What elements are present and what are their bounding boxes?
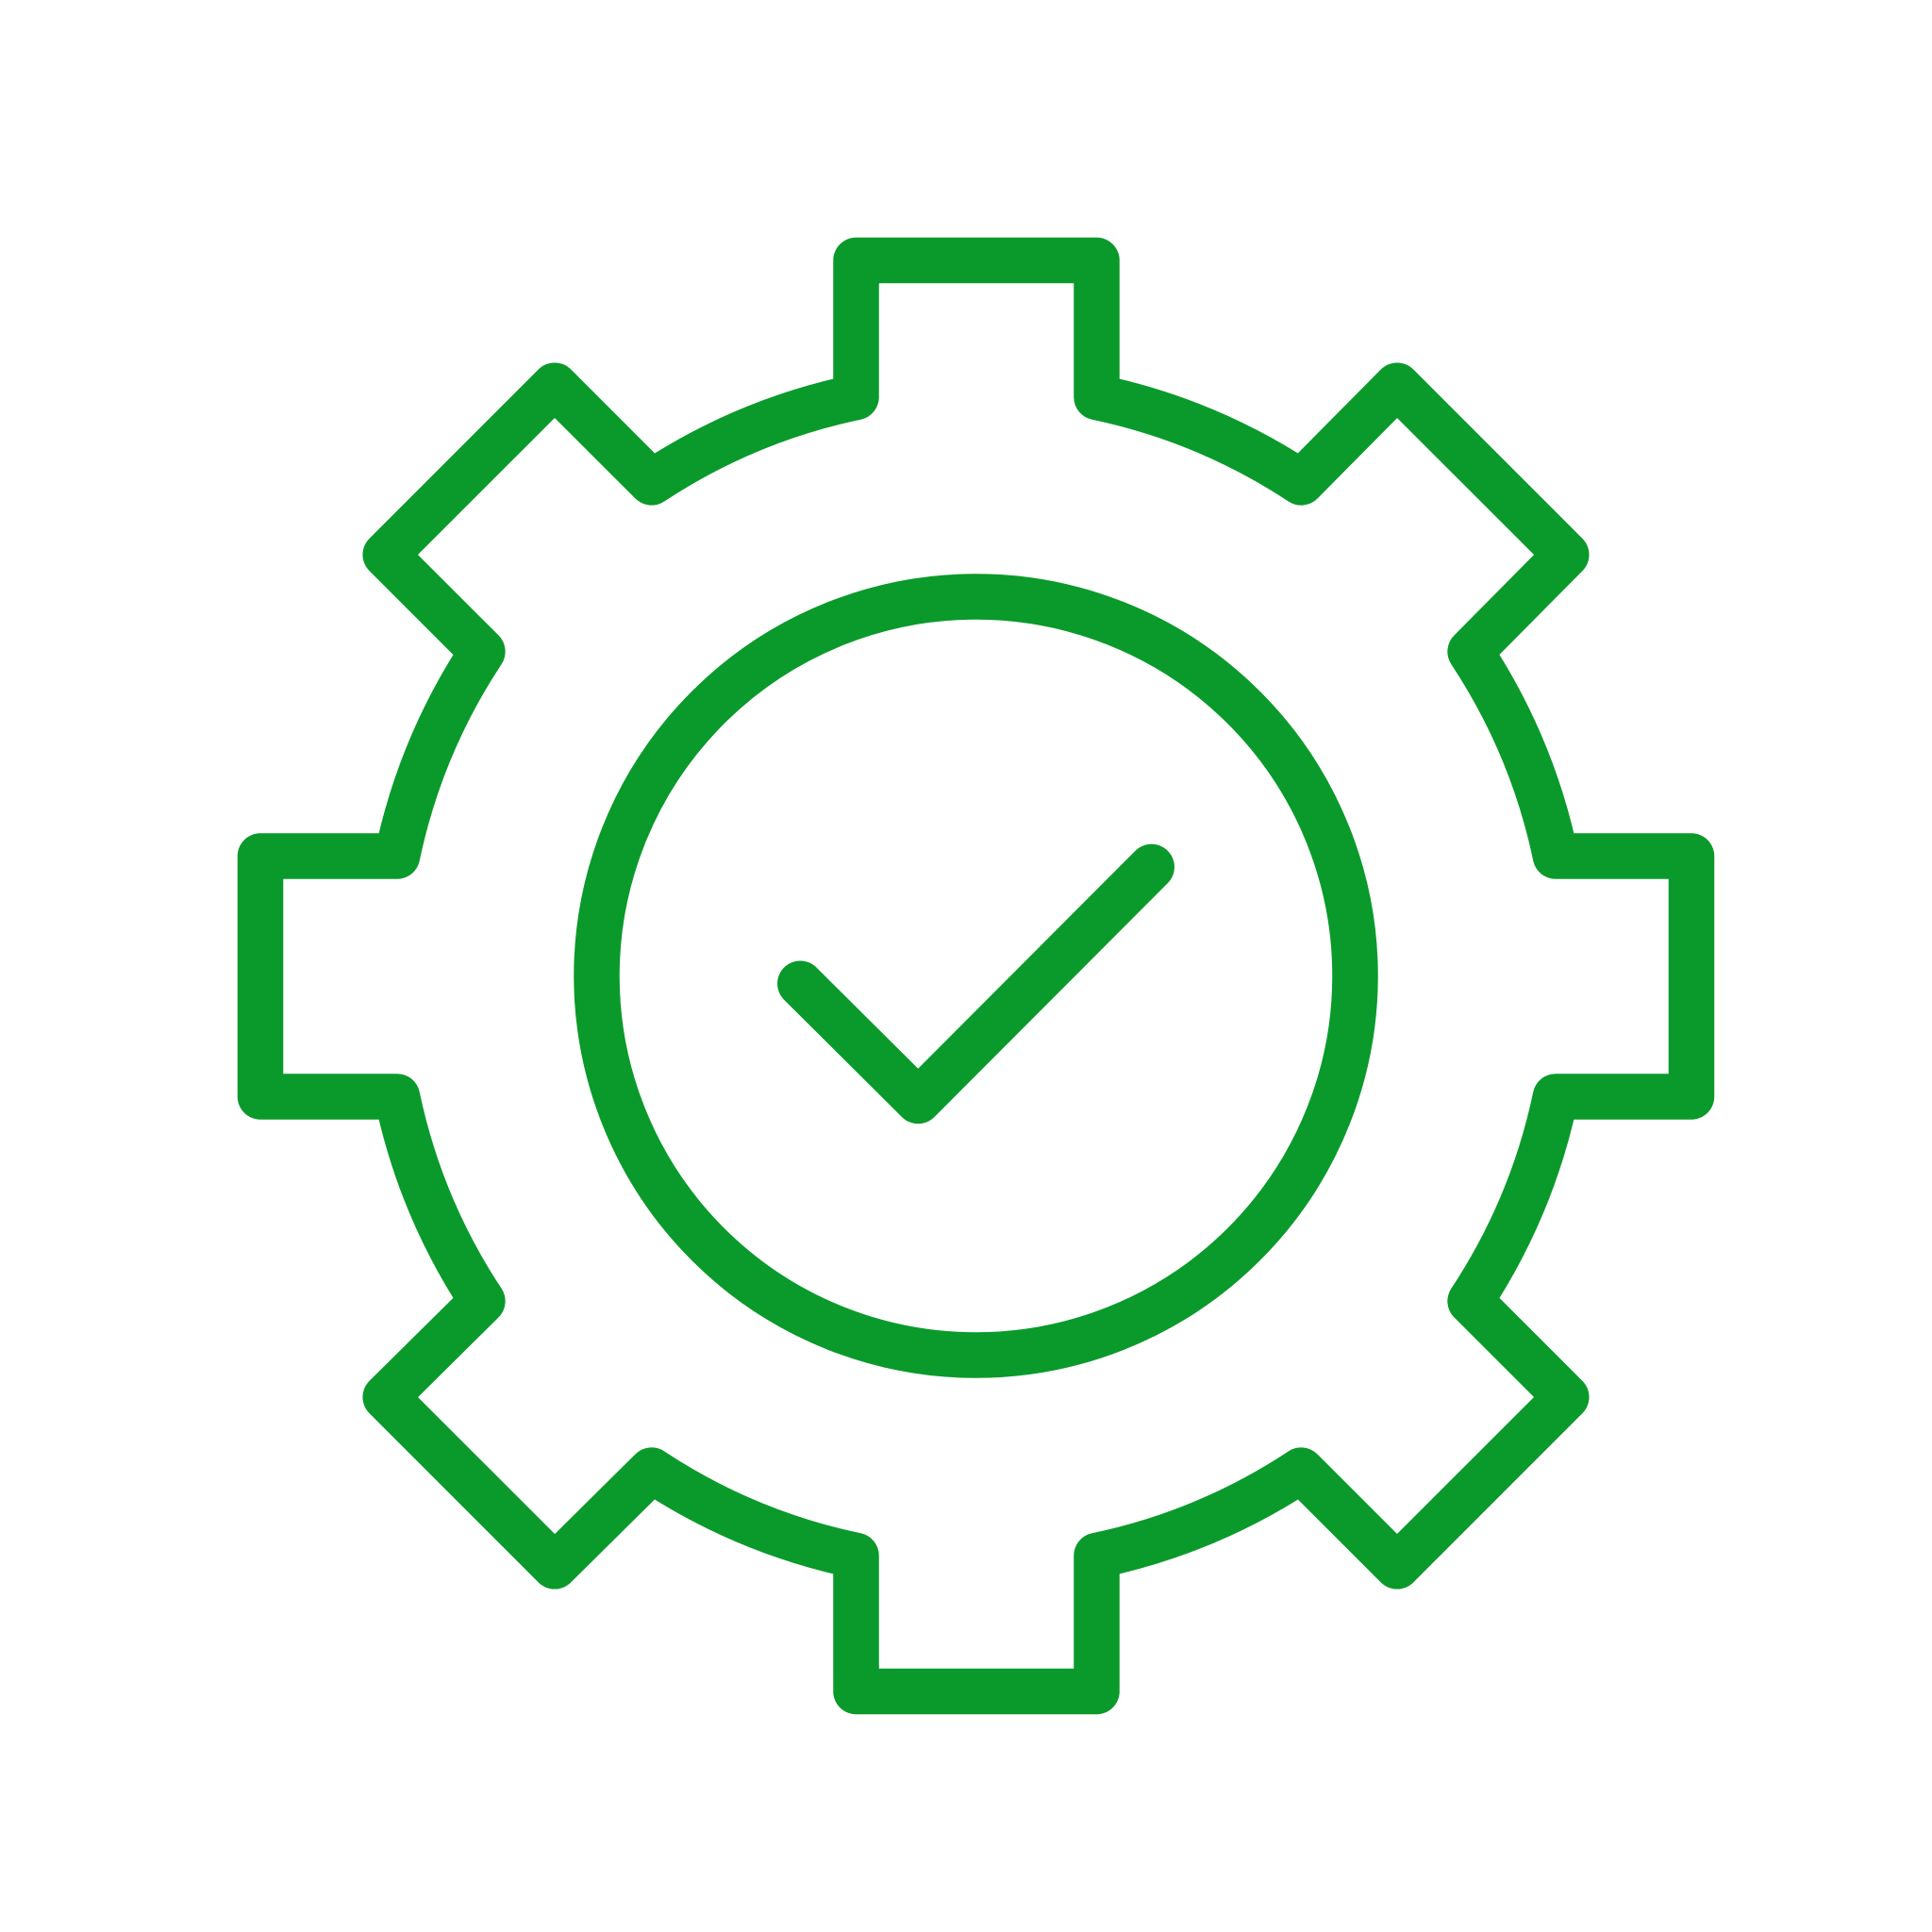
check mark: [800, 867, 1152, 1101]
gear outline: [260, 260, 1691, 1691]
inner circle: [596, 596, 1355, 1355]
